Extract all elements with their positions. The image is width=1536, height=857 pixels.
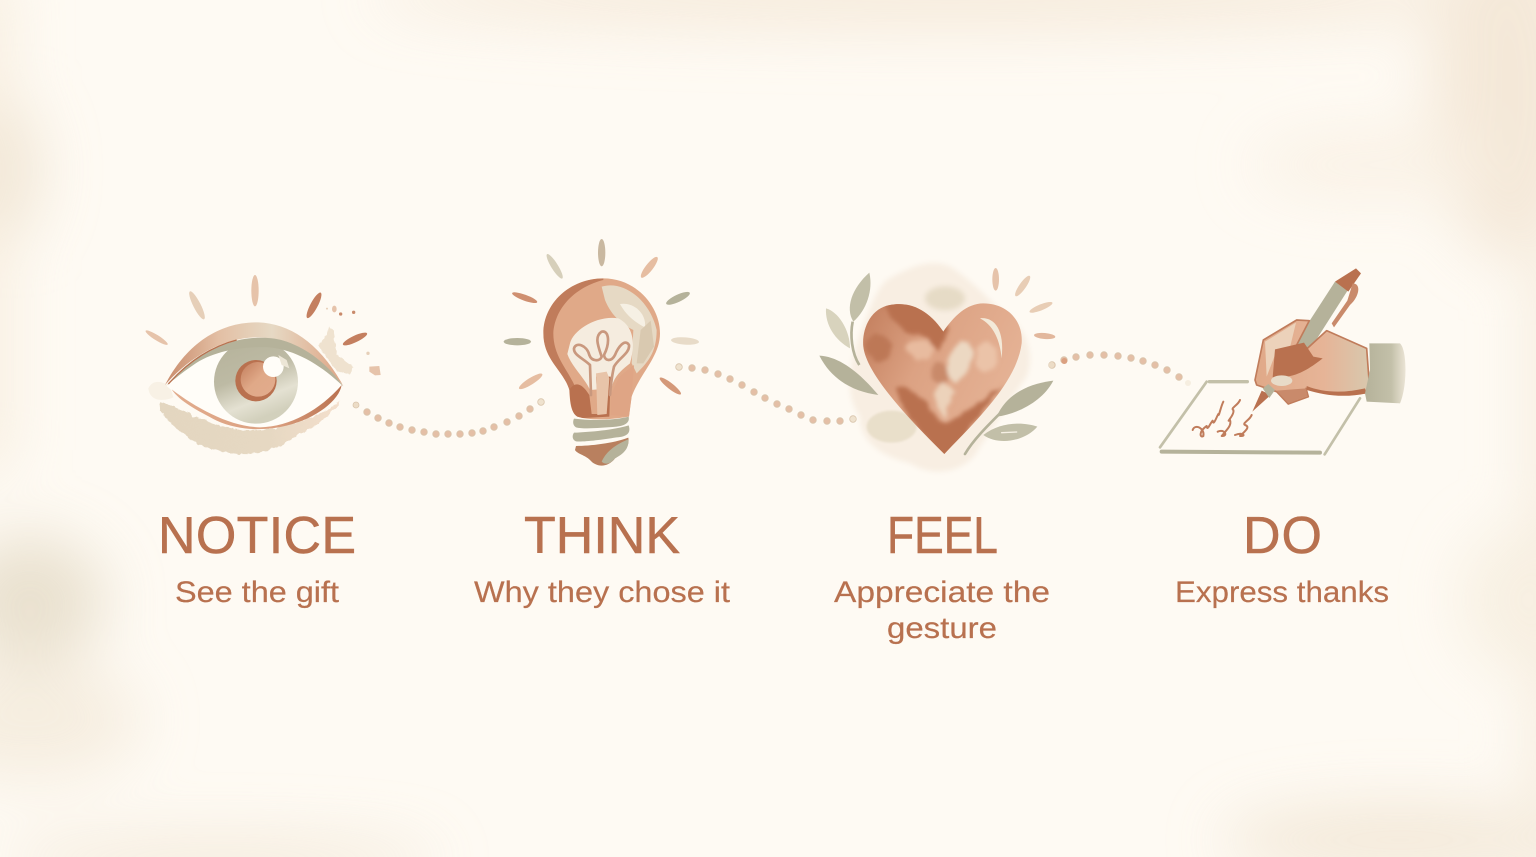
label: think	[474, 507, 731, 609]
eye white	[167, 340, 343, 427]
shirt cuff	[1365, 343, 1405, 403]
do heading: DO	[1243, 507, 1322, 565]
bulb rays	[504, 239, 699, 397]
bulb filament	[574, 332, 629, 395]
feel heading: FEEL	[887, 507, 998, 565]
dotted connector: bulb to heart	[676, 364, 856, 424]
label: feel	[834, 507, 1050, 645]
leaf top left	[819, 273, 878, 395]
leaf bottom right	[965, 381, 1053, 454]
eye wash stains	[148, 327, 353, 454]
think heading: THINK	[524, 507, 680, 565]
label: notice	[158, 507, 356, 609]
heart shape	[863, 303, 1022, 454]
upper eyelid	[165, 322, 343, 387]
notice subtitle: See the gift	[175, 576, 340, 609]
handwriting scribbles	[1193, 400, 1252, 436]
icon: light bulb	[504, 239, 699, 466]
hand	[1255, 320, 1370, 404]
eye rays	[144, 275, 368, 348]
lower eyelid	[172, 385, 342, 429]
icon: eye	[144, 275, 381, 454]
iris and pupil	[214, 340, 298, 424]
eye splatter	[326, 306, 381, 375]
icon: hand writing with pen	[1160, 268, 1405, 454]
heart mottling	[866, 299, 1003, 463]
feel subtitle second line: gesture	[887, 612, 997, 645]
icon: heart	[819, 263, 1067, 472]
notice heading: NOTICE	[158, 507, 356, 565]
think subtitle: Why they chose it	[474, 576, 731, 609]
pen barrel	[1293, 268, 1361, 351]
feel subtitle: Appreciate the	[834, 576, 1050, 609]
bulb shading	[543, 278, 657, 418]
heart wash stain	[850, 263, 1030, 472]
paper sheet edges	[1160, 382, 1360, 454]
palm shadow and thumb	[1265, 323, 1367, 403]
dotted connector: eye to bulb	[353, 399, 544, 437]
bulb screw base	[573, 417, 629, 466]
dotted connector: heart to hand	[1049, 352, 1191, 386]
do subtitle: Express thanks	[1175, 576, 1389, 609]
bulb glass	[543, 278, 660, 419]
label: do	[1175, 507, 1389, 609]
heart rays	[992, 268, 1067, 368]
pen tip	[1252, 384, 1275, 412]
